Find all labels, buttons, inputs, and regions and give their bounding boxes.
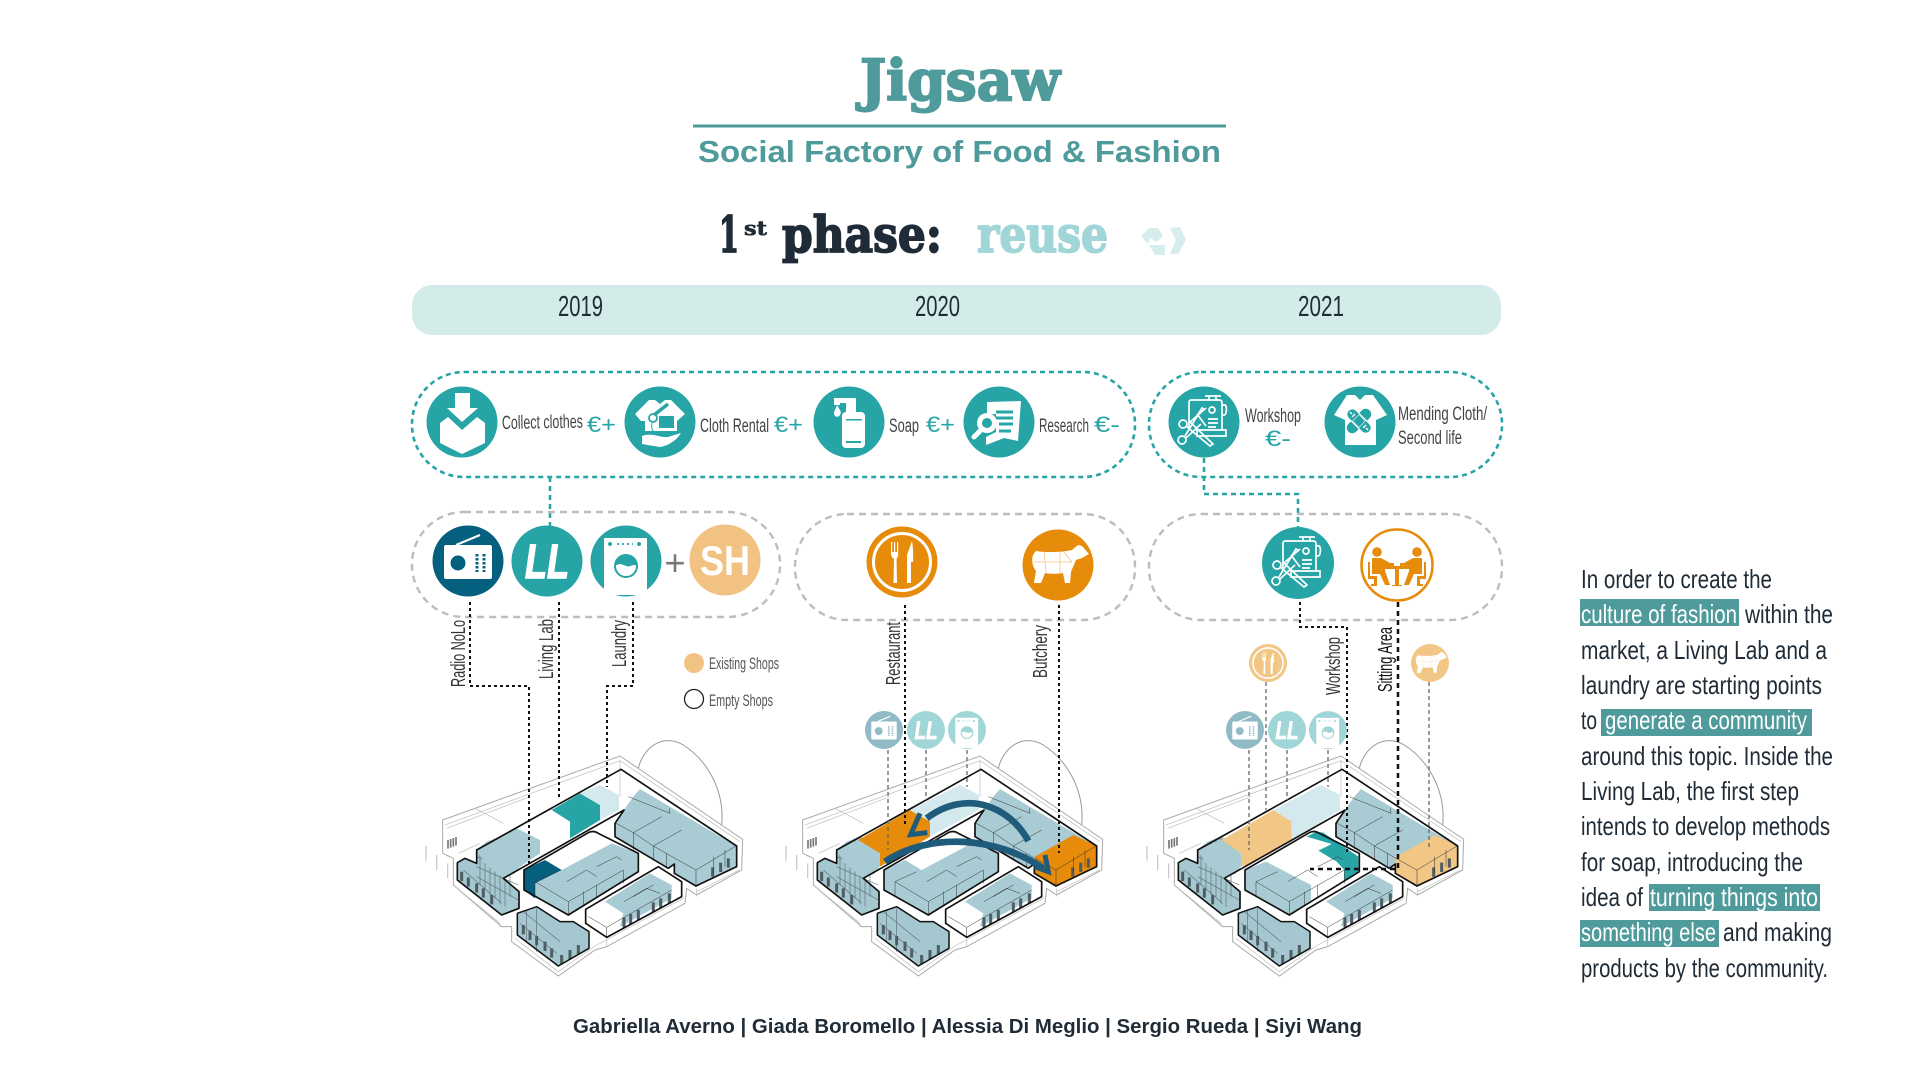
label: mending	[1398, 404, 1488, 449]
timeline band: 2021	[1298, 291, 1344, 323]
vertical labels: Workshop	[1323, 637, 1345, 695]
phase heading: st	[744, 216, 768, 240]
icon: restaurant	[866, 526, 938, 598]
label: research: Research	[1039, 416, 1089, 437]
restaurant unit	[858, 810, 930, 867]
text block: description	[1580, 564, 1833, 983]
legend	[684, 653, 779, 710]
panel: 2021 shops	[1149, 514, 1502, 620]
highlight: culture of fashion: culture of fashion	[1581, 599, 1737, 629]
timeline band	[412, 285, 1501, 335]
workshop unit	[1307, 832, 1358, 881]
icon: workshop	[1262, 527, 1334, 599]
text block: description: idea of	[1581, 882, 1644, 912]
icon: workshop	[1168, 386, 1240, 458]
text block: description: laundry are starting points	[1581, 670, 1822, 700]
phase heading: phase:	[782, 205, 942, 264]
arrows	[885, 803, 1048, 872]
map: 2020	[786, 741, 1103, 976]
vertical labels	[448, 619, 1397, 695]
radio nolo unit	[524, 860, 562, 898]
label: workshop: Workshop	[1245, 406, 1301, 427]
living lab unit	[552, 793, 600, 838]
euro plus: €+	[587, 412, 616, 437]
icon: laundry	[590, 526, 662, 596]
icon: cloth rental	[624, 386, 696, 458]
label: mending: Mending Cloth/	[1398, 404, 1488, 425]
legend: Existing Shops	[709, 654, 779, 673]
small icons: 2020: LL	[914, 717, 938, 745]
text block: description: to	[1581, 705, 1597, 735]
icon: mending	[1324, 386, 1396, 458]
small icons: 2021	[1226, 644, 1449, 749]
text block: description: market, a Living Lab and a	[1581, 635, 1827, 665]
laundry unit	[580, 785, 619, 820]
label: mending: Second life	[1398, 428, 1462, 449]
legend: Empty Shops	[709, 691, 773, 710]
subtitle: Social Factory of Food & Fashion	[698, 134, 1221, 169]
phase heading: 1	[719, 205, 739, 264]
connector: workshop	[1204, 458, 1298, 527]
butchery unit	[1035, 835, 1097, 886]
timeline band: 2020	[915, 291, 960, 323]
small icons: 2020	[865, 711, 986, 749]
euro plus: €+	[926, 412, 955, 437]
label: soap: Soap	[889, 416, 919, 437]
center island fill	[535, 843, 638, 915]
plus: +	[664, 542, 686, 583]
vertical labels: Butchery	[1030, 625, 1052, 678]
leader lines: 2021	[1249, 602, 1429, 869]
phase heading	[719, 205, 1108, 264]
text block: description: products by the community.	[1581, 953, 1828, 983]
label: collect clothes: Collect clothes	[502, 412, 583, 434]
icon: recycle	[1141, 227, 1186, 255]
icon: SH	[690, 524, 760, 596]
vertical labels: Sitting Area	[1375, 626, 1397, 692]
text block: description: for soap, introducing the	[1581, 847, 1803, 877]
authors: Gabriella Averno | Giada Boromello | Alessia Di Meglio | Sergio Rueda | Siyi Wang	[573, 1016, 1362, 1038]
icon: butchery	[1022, 530, 1094, 600]
text block: description: within the	[1744, 599, 1833, 629]
text block: description: Living Lab, the first step	[1581, 776, 1799, 806]
icon: living lab: LL	[525, 536, 569, 589]
vertical labels: Laundry	[609, 620, 631, 667]
northwest bar	[477, 828, 540, 878]
text block: description: In order to create the	[1581, 564, 1772, 594]
euro plus: €+	[774, 412, 803, 437]
icon: sitting area	[1362, 530, 1432, 600]
icon: radio	[432, 526, 504, 596]
text block: description: intends to develop methods	[1581, 811, 1830, 841]
icon: soap	[814, 386, 884, 458]
leader lines: 2020	[888, 605, 1059, 853]
panel: activities 2019-2020	[412, 372, 1135, 477]
panel: activities 2021	[1149, 372, 1502, 477]
timeline band: 2019	[558, 291, 603, 323]
icon: research	[964, 386, 1034, 458]
text block: description: and making	[1723, 917, 1832, 947]
panel: 2020 shops	[795, 514, 1135, 620]
text block: description: around this topic. Inside the	[1581, 741, 1833, 771]
connector: activities to living lab	[549, 477, 551, 526]
euro minus: €-	[1094, 412, 1120, 437]
title: Jigsaw	[855, 48, 1062, 114]
icon: collect clothes	[426, 386, 498, 458]
panel: 2019 shops	[412, 512, 780, 617]
highlight: turning things into: turning things into	[1650, 882, 1818, 912]
icon: SH: SH	[700, 537, 750, 584]
highlight: something else: something else	[1581, 917, 1716, 947]
vertical labels: Living Lab	[536, 619, 558, 679]
leader lines: 2019	[470, 602, 633, 866]
vertical labels: Radio NoLo	[448, 620, 470, 687]
map: 2019	[426, 741, 743, 976]
phase heading: reuse	[977, 205, 1108, 264]
icon: living lab	[512, 526, 582, 596]
euro minus: €-	[1265, 426, 1291, 451]
small icons: 2021: LL	[1276, 717, 1298, 745]
highlight: generate a community: generate a community	[1605, 705, 1807, 735]
vertical labels: Restaurant	[883, 622, 905, 685]
title rule	[693, 124, 1226, 128]
label: cloth rental: Cloth Rental	[700, 416, 769, 437]
map: 2021	[1147, 741, 1464, 976]
